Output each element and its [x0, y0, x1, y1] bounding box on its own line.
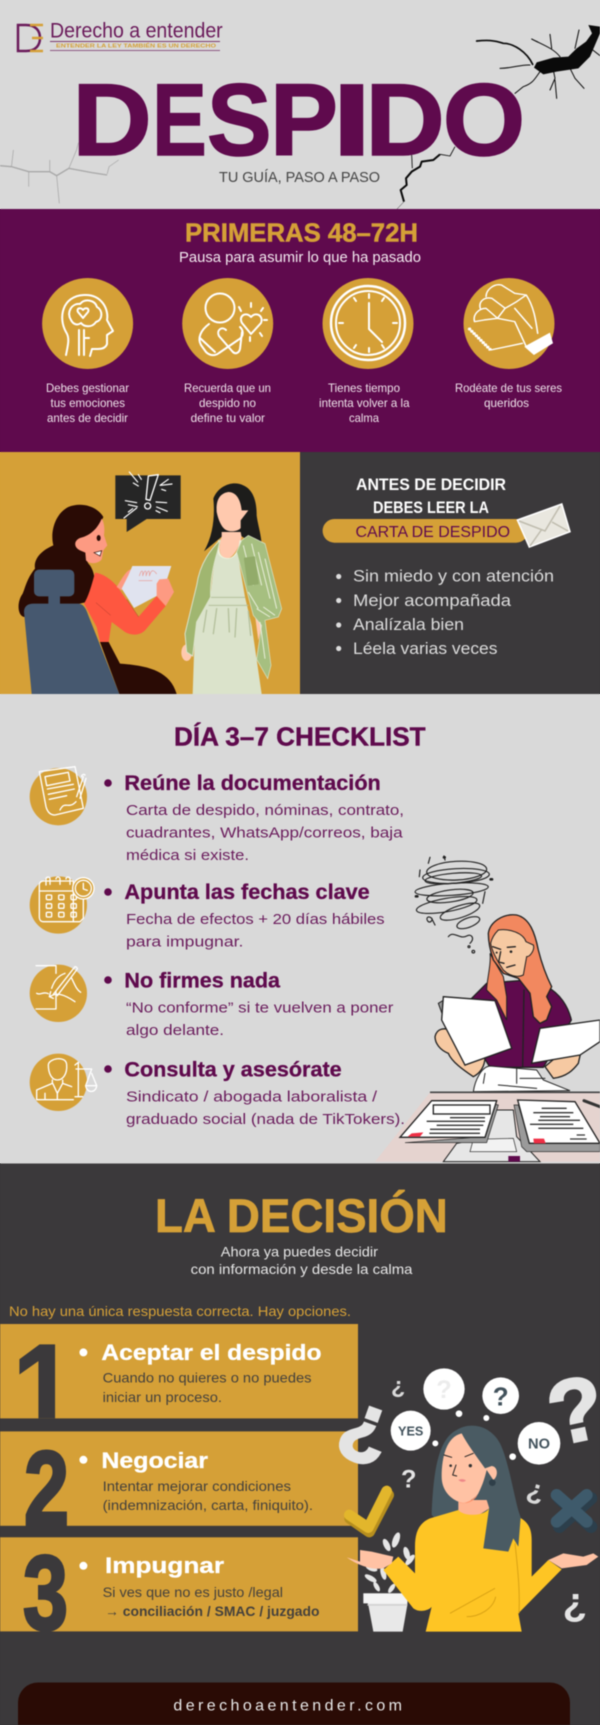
option 2: Intentar mejorar condiciones	[103, 1478, 291, 1494]
icon: calendar	[30, 876, 94, 934]
illustration: woman deciding	[331, 1356, 600, 1632]
item: documentacion: médica si existe.	[126, 847, 249, 864]
standing woman	[181, 483, 282, 694]
caption 2: define tu valor	[191, 411, 265, 425]
icon: envelope	[517, 504, 570, 547]
checklist bullets: Mejor acompañada	[353, 591, 512, 610]
main title: I	[332, 63, 372, 177]
question marks: ¿	[563, 1580, 587, 1624]
caption 1: antes de decidir	[47, 411, 128, 425]
item: consulta: Consulta y asesórate	[124, 1059, 342, 1082]
question marks: ?	[401, 1465, 416, 1493]
option 1: iniciar un proceso.	[103, 1389, 222, 1405]
panel: la decision	[0, 1164, 600, 1725]
thought bubbles: ?	[436, 1376, 452, 1404]
footer bar	[18, 1682, 570, 1725]
heading: PRIMERAS 48–72H	[185, 218, 418, 248]
woman	[435, 915, 600, 1092]
item: fechas: Fecha de efectos + 20 días hábiles	[126, 911, 385, 928]
item: fechas: Apunta las fechas clave	[124, 881, 370, 904]
icon: brain head	[42, 278, 133, 369]
intro text: Ahora ya puedes decidir	[221, 1244, 378, 1260]
panel: primeras 48-72h	[0, 209, 600, 452]
caption 4: queridos	[484, 396, 529, 410]
footer bar: derechoaentender.com	[173, 1698, 402, 1715]
caption 1: tus emociones	[50, 396, 125, 410]
caption 2: despido no	[199, 396, 256, 410]
main title: E	[152, 63, 207, 177]
icon: check mark	[349, 1491, 388, 1532]
option 1: 1	[12, 1316, 76, 1463]
option 1: Cuando no quieres o no puedes	[103, 1370, 311, 1386]
option 3: Impugnar	[105, 1553, 225, 1578]
heading: ANTES DE DECIDIR	[356, 475, 506, 494]
item: no firmes	[30, 965, 393, 1039]
caption 2	[184, 381, 271, 425]
pill: carta de despido	[323, 519, 528, 543]
logo: ENTENDER LA LEY TAMBIÉN ES UN DERECHO	[56, 42, 216, 50]
checklist bullets: Analízala bien	[353, 615, 464, 634]
heading line 2: DEBES LEER LA	[373, 498, 489, 517]
intro text	[191, 1244, 413, 1277]
chair	[24, 570, 119, 694]
heading: DÍA 3–7 CHECKLIST	[174, 722, 426, 752]
icon: clasped hands	[464, 278, 554, 369]
heading: LA DECISIÓN	[155, 1189, 448, 1242]
panel: dia 3-7 checklist	[0, 694, 600, 1164]
scribble	[415, 856, 492, 953]
caption 3: calma	[349, 411, 379, 425]
option 2: (indemnización, carta, finiquito).	[103, 1497, 313, 1513]
thought bubbles: NO	[528, 1436, 550, 1452]
main title: P	[270, 63, 338, 177]
illustration: overwhelmed woman with documents	[375, 856, 600, 1162]
caption 3: intenta volver a la	[319, 396, 410, 410]
icon: hand signing	[30, 965, 87, 1022]
item: no firmes: algo delante.	[126, 1022, 224, 1039]
speech bubble	[115, 472, 181, 532]
caption 2: Recuerda que un	[184, 381, 271, 395]
caption 1	[46, 381, 129, 425]
question marks	[331, 1356, 600, 1624]
option 3: Si ves que no es justo /legal	[103, 1584, 283, 1600]
option 2	[0, 1430, 358, 1548]
item: documentacion	[30, 767, 404, 864]
subheading: Pausa para asumir lo que ha pasado	[179, 249, 421, 266]
icon: x mark	[557, 1495, 591, 1527]
icon: clock	[322, 278, 414, 369]
caption 3	[319, 381, 410, 425]
option 3	[0, 1534, 358, 1652]
option 3: 3	[23, 1534, 68, 1652]
option 1: Aceptar el despido	[101, 1340, 322, 1365]
panel: antes de decidir	[300, 452, 600, 694]
item: consulta: graduado social (nada de TikTokers).	[126, 1111, 405, 1128]
item: documentacion: Reúne la documentación	[124, 772, 381, 795]
icon: lawyer and scales	[30, 1054, 97, 1111]
main title: D	[72, 63, 152, 177]
crack: black right	[477, 25, 600, 98]
item: fechas	[30, 876, 385, 951]
caption 3: Tienes tiempo	[328, 381, 400, 395]
desk documents	[400, 1100, 600, 1162]
pill: carta de despido: CARTA DE DESPIDO	[356, 524, 510, 541]
thought bubbles: ?	[493, 1381, 509, 1411]
item: fechas: para impugnar.	[126, 934, 243, 951]
option 2: Negociar	[101, 1448, 208, 1473]
caption 4: Rodéate de tus seres	[455, 381, 562, 395]
checklist bullets: Léela varias veces	[353, 639, 498, 658]
logo: Derecho a entender	[50, 20, 223, 43]
crack: black lower	[387, 147, 455, 220]
question marks: ¿	[391, 1372, 405, 1398]
option 3: → conciliación / SMAC / juzgado	[105, 1603, 320, 1619]
option 1	[0, 1323, 359, 1420]
icon: document	[30, 767, 87, 825]
item: documentacion: Carta de despido, nóminas, contrato,	[126, 802, 404, 819]
note: No hay una única respuesta correcta. Hay opciones.	[9, 1303, 351, 1319]
main title: D	[365, 63, 445, 177]
main title: S	[207, 63, 272, 177]
item: no firmes: No firmes nada	[124, 970, 280, 993]
checklist bullets: Sin miedo y con atención	[353, 567, 554, 586]
checklist bullets	[336, 567, 554, 658]
icon: self-love heart	[182, 278, 273, 369]
question marks: ¿	[524, 1473, 548, 1507]
panel: illustration, women with letter	[0, 452, 300, 694]
thought bubbles	[391, 1368, 560, 1465]
option 2: 2	[24, 1430, 69, 1548]
item: no firmes: “No conforme” si te vuelven a poner	[126, 1000, 393, 1017]
plant	[363, 1531, 416, 1632]
thought bubbles: YES	[398, 1424, 423, 1438]
item: consulta	[30, 1054, 405, 1128]
intro text: con información y desde la calma	[191, 1261, 413, 1277]
crack: grey left	[0, 143, 119, 203]
desk	[375, 1092, 600, 1162]
item: consulta: Sindicato / abogada laboralista /	[126, 1089, 378, 1106]
logo	[18, 20, 223, 51]
caption 4	[455, 381, 562, 410]
seated woman	[19, 505, 177, 694]
subtitle: TU GUÍA, PASO A PASO	[219, 169, 380, 186]
item: documentacion: cuadrantes, WhatsApp/correos, baja	[126, 825, 403, 842]
document stack behind	[438, 1000, 447, 1028]
question marks: ¿	[331, 1373, 407, 1473]
main title: O	[443, 63, 525, 177]
header panel	[0, 0, 600, 220]
woman	[347, 1426, 598, 1632]
caption 1: Debes gestionar	[46, 381, 129, 395]
